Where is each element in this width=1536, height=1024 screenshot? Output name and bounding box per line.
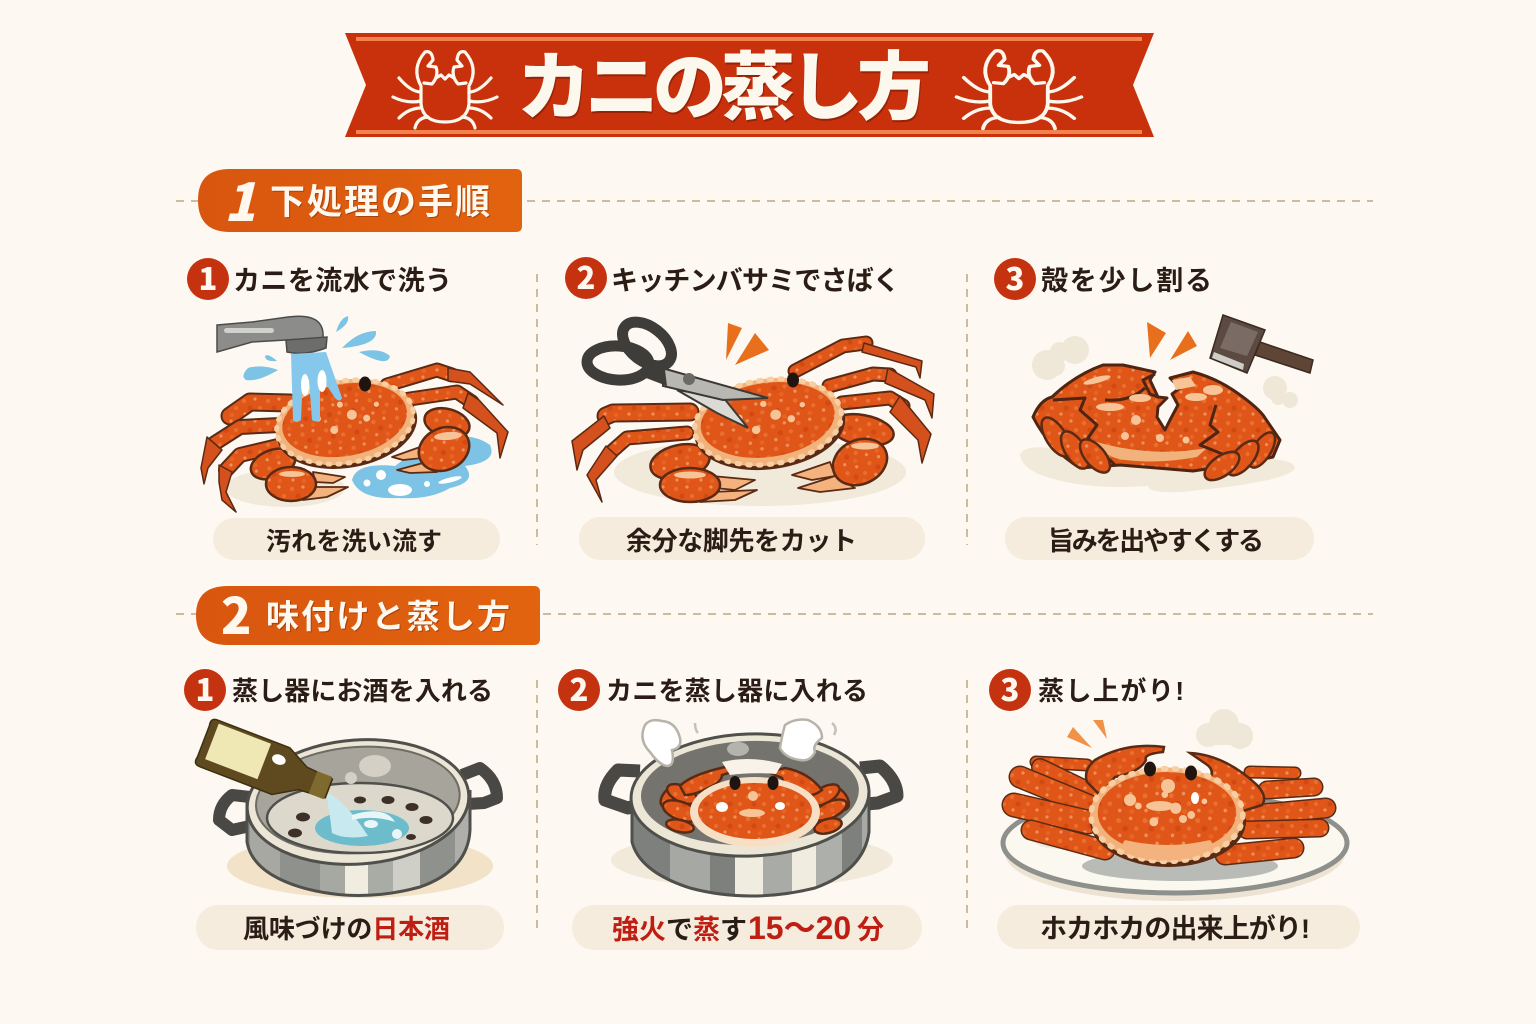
caption pill 1-2	[579, 517, 925, 560]
steam puffs	[642, 720, 822, 766]
icon: crab left	[393, 52, 497, 128]
illustration: cracked crab shell	[1020, 315, 1313, 492]
caption pill 2-3: ホカホカの出来上がり!	[1040, 913, 1310, 944]
crab claws	[247, 404, 476, 501]
crab legs on plate	[1014, 762, 1326, 855]
section heading 2: 味付けと蒸し方	[266, 598, 510, 635]
section heading 2	[196, 577, 540, 649]
step heading 1-3	[994, 254, 1212, 300]
illustration: crab and scissors	[572, 313, 934, 506]
caption pill 2-1: 風味づけの日本酒	[243, 914, 450, 944]
step heading 1-2: 2	[577, 253, 595, 298]
crab legs	[201, 368, 508, 512]
crab body in pot	[690, 776, 820, 847]
step heading 1-1: カニを流水で洗う	[233, 266, 452, 296]
step heading 1-3: 殻を少し割る	[1041, 266, 1212, 296]
spilled sake	[315, 810, 409, 846]
caption pill 2-1	[196, 905, 504, 950]
step heading 2-3: 蒸し上がり!	[1038, 676, 1184, 706]
plate	[1005, 805, 1345, 901]
step heading 2-3	[989, 665, 1184, 711]
section heading 2: 2	[221, 577, 251, 649]
step heading 1-2: キッチンバサミでさばく	[611, 266, 900, 296]
crab claws	[647, 410, 896, 502]
pot rim and interior	[243, 732, 473, 872]
caption pill 2-2: 15～20	[748, 910, 851, 946]
belly	[1093, 441, 1207, 461]
icon: crab right	[957, 51, 1081, 129]
section heading 1	[198, 161, 522, 236]
steam cloud	[1196, 709, 1253, 749]
steamer holes	[288, 796, 432, 840]
step heading 1-3: 3	[1006, 254, 1024, 299]
step heading 1-1	[187, 254, 452, 300]
caption pill 2-2: で蒸す	[666, 915, 747, 945]
impact marks	[726, 323, 769, 365]
title: カニの蒸し方	[517, 46, 931, 129]
illustration: crab steaming in pot	[605, 720, 897, 910]
pot body	[634, 806, 868, 894]
caption pill 2-3	[997, 905, 1360, 949]
caption pill 1-2: 余分な脚先をカット	[626, 526, 857, 556]
faucet	[217, 316, 327, 353]
step heading 2-1: 1	[196, 665, 214, 710]
section heading 1: 下処理の手順	[270, 183, 490, 222]
crab claws in pot	[680, 759, 822, 796]
caption pill 1-3: 旨みを出やすくする	[1048, 526, 1264, 556]
crack details	[1053, 374, 1225, 465]
mallet	[1210, 315, 1313, 373]
crab body	[688, 368, 851, 479]
impact marks	[1067, 720, 1107, 748]
step heading 2-2	[558, 665, 868, 711]
impact marks	[1147, 322, 1197, 360]
sake bottle	[194, 718, 337, 813]
pot rim and interior	[629, 730, 871, 860]
folded legs	[1036, 413, 1280, 486]
puddle	[352, 436, 492, 498]
water stream	[291, 352, 342, 422]
crab legs	[572, 343, 934, 502]
crab body on plate	[1090, 768, 1246, 867]
scissors	[586, 313, 768, 428]
crab claws on plate	[1086, 746, 1264, 812]
crab body	[269, 368, 424, 479]
step heading 2-1: 蒸し器にお酒を入れる	[232, 676, 493, 706]
caption pill 1-1: 汚れを洗い流す	[266, 528, 442, 556]
caption pill 1-1	[213, 518, 500, 560]
step heading 2-2: 2	[570, 665, 588, 710]
section heading 1: 1	[224, 161, 256, 236]
step heading 1-1: 1	[199, 254, 217, 299]
step heading 2-2: カニを蒸し器に入れる	[606, 676, 868, 706]
pot handles	[219, 768, 497, 830]
pot handles	[605, 766, 897, 808]
step heading 1-2	[565, 253, 900, 299]
pot body	[248, 809, 468, 894]
crab legs in pot	[656, 780, 853, 836]
caption pill 1-3	[1005, 517, 1314, 560]
caption pill 2-2: 強火	[612, 915, 666, 945]
illustration: crab under faucet	[201, 316, 508, 512]
illustration: finished crab on plate	[1003, 709, 1347, 901]
shell	[1033, 365, 1280, 471]
title banner	[345, 33, 1154, 137]
caption pill 2-2	[572, 905, 922, 950]
illustration: pouring sake into steamer	[194, 718, 497, 910]
water drops	[243, 316, 390, 380]
caption pill 2-2: 分	[857, 915, 884, 945]
steam clouds	[1032, 336, 1298, 408]
step heading 2-3: 3	[1001, 665, 1019, 710]
step heading 2-1	[184, 665, 493, 711]
